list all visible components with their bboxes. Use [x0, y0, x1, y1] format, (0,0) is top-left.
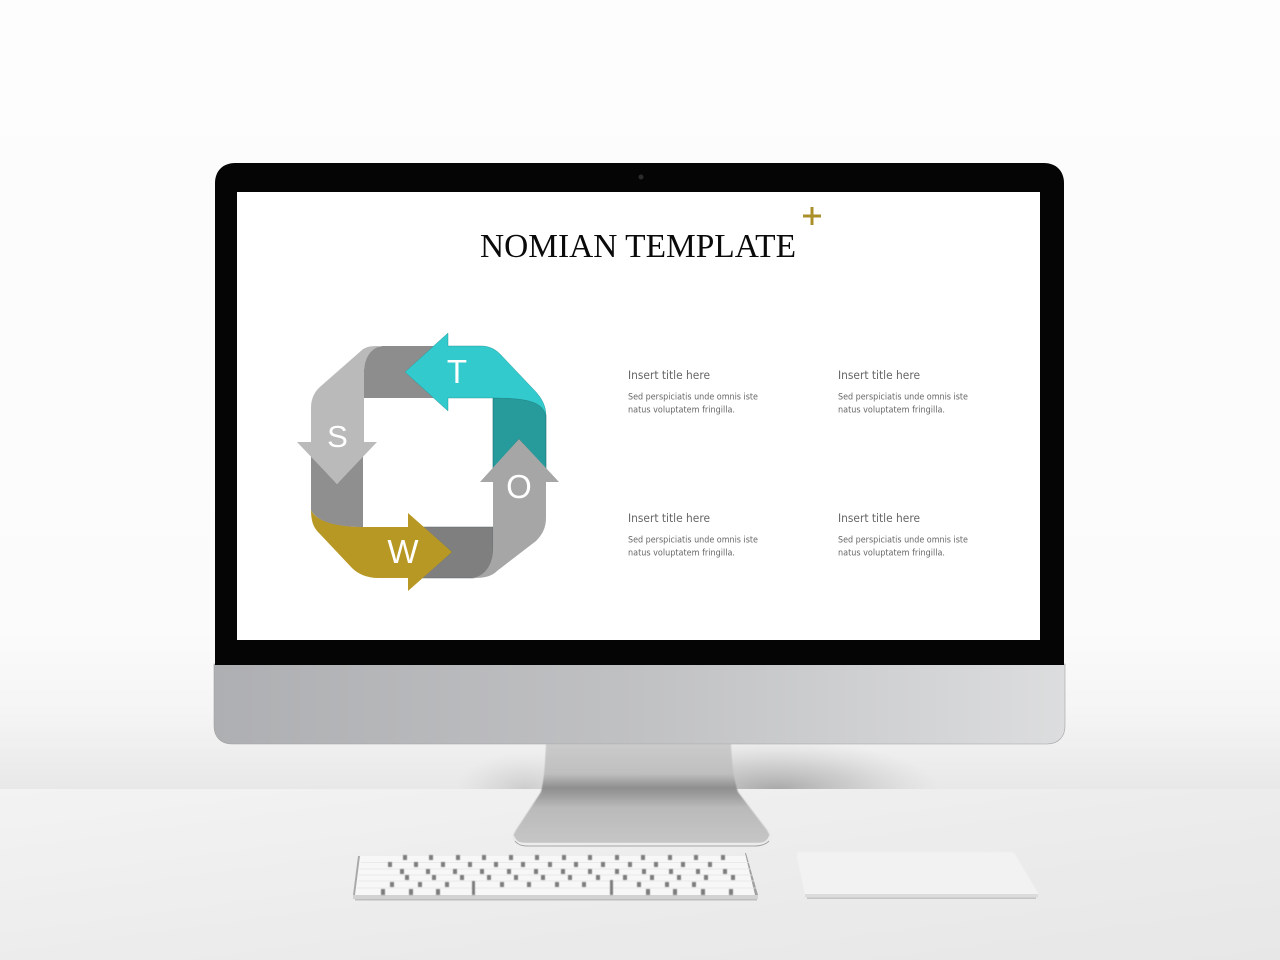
letter T: T [447, 353, 467, 390]
segment: bottom connector [422, 527, 493, 578]
text block: top left: natus voluptatem fringilla. [628, 406, 735, 416]
text block: bottom right: natus voluptatem fringilla. [838, 548, 945, 558]
text block: top right: natus voluptatem fringilla. [838, 406, 945, 416]
icon: plus [803, 207, 821, 225]
text block: top right: Insert title here [838, 368, 920, 382]
arrow: S [297, 346, 380, 484]
monitor stand [513, 744, 770, 846]
text block: top left [628, 368, 758, 416]
monitor [214, 163, 1065, 744]
segment: left connector [311, 456, 363, 527]
text block: bottom left: Sed perspiciatis unde omnis iste [628, 536, 758, 546]
arrow: T [405, 333, 546, 416]
text block: bottom right: Insert title here [838, 511, 920, 525]
camera [638, 174, 644, 180]
slide title: NOMIAN TEMPLATE [480, 228, 796, 265]
letter S: S [327, 419, 348, 454]
text block: bottom right [838, 511, 968, 558]
letter O: O [506, 468, 532, 505]
screen [237, 192, 1040, 640]
text block: bottom right: Sed perspiciatis unde omnis iste [838, 536, 968, 546]
text block: bottom left: natus voluptatem fringilla. [628, 548, 735, 558]
trackpad [797, 852, 1038, 899]
text block: top right: Sed perspiciatis unde omnis iste [838, 392, 968, 402]
monitor bezel [215, 163, 1064, 665]
letter W: W [387, 533, 419, 570]
text block: top left: Insert title here [628, 368, 710, 382]
segment: top connector [364, 346, 435, 398]
keyboard [353, 853, 758, 900]
SWOT cycle diagram [297, 333, 559, 591]
text block: bottom left: Insert title here [628, 511, 710, 525]
text block: bottom left [628, 511, 758, 558]
text block: top right [838, 368, 968, 416]
arrow: O [472, 439, 559, 578]
segment: right connector [493, 398, 546, 469]
arrow: W [311, 510, 452, 591]
monitor chin [214, 664, 1065, 744]
text block: top left: Sed perspiciatis unde omnis iste [628, 392, 758, 402]
